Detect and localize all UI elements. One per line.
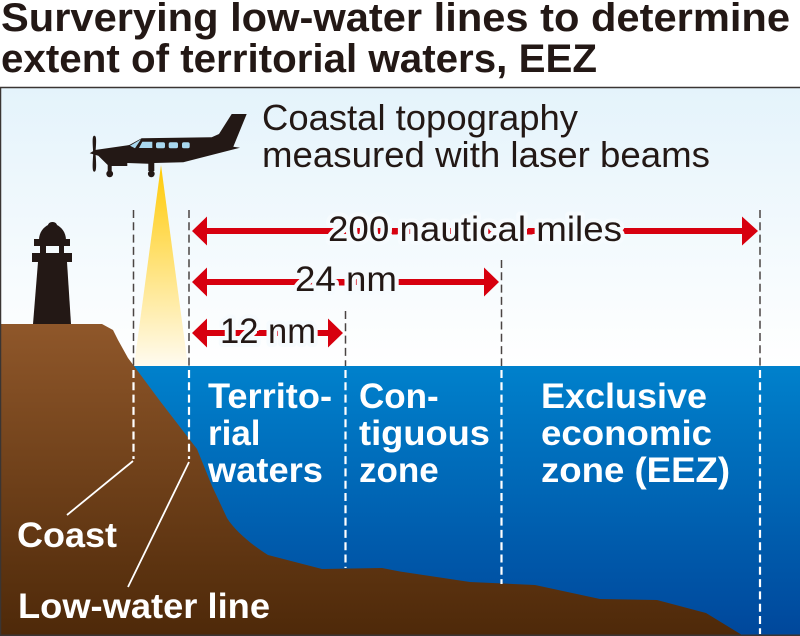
icon: lighthouse [32,222,72,324]
arrow: 200 nautical miles [192,209,758,249]
label: contiguous zone: Con- [359,377,439,416]
sky background [0,87,800,366]
icon: airplane [90,114,247,177]
label: exclusive economic zone: economic [541,414,712,453]
arrow: 200 nautical miles: 200 nautical miles [328,209,622,249]
arrow: 12 nm [192,311,343,351]
arrow: 24 nm [192,259,499,299]
label: territorial waters: waters [207,451,323,490]
title [1,0,790,81]
label: contiguous zone: tiguous [359,414,490,453]
leader lines [67,461,189,587]
caption: laser beams [262,97,710,175]
label: exclusive economic zone: Exclusive [541,377,707,416]
laser beam [134,165,188,366]
label: contiguous zone: zone [359,451,439,490]
dashed boundary lines [134,210,760,634]
label: territorial waters: rial [208,414,261,453]
label: low-water line: Low-water line [18,587,270,626]
sea [0,366,800,636]
label: territorial waters: Territo- [208,377,332,416]
arrow: 12 nm: 12 nm [220,311,316,351]
label: coast: Coast [17,516,117,555]
caption: laser beams: Coastal topography [262,97,578,138]
caption: laser beams: measured with laser beams [262,134,710,175]
label: exclusive economic zone: zone (EEZ) [541,451,730,490]
land cross-section [0,324,742,635]
title: extent of territorial waters, EEZ [1,37,597,81]
arrow: 24 nm: 24 nm [295,259,397,299]
